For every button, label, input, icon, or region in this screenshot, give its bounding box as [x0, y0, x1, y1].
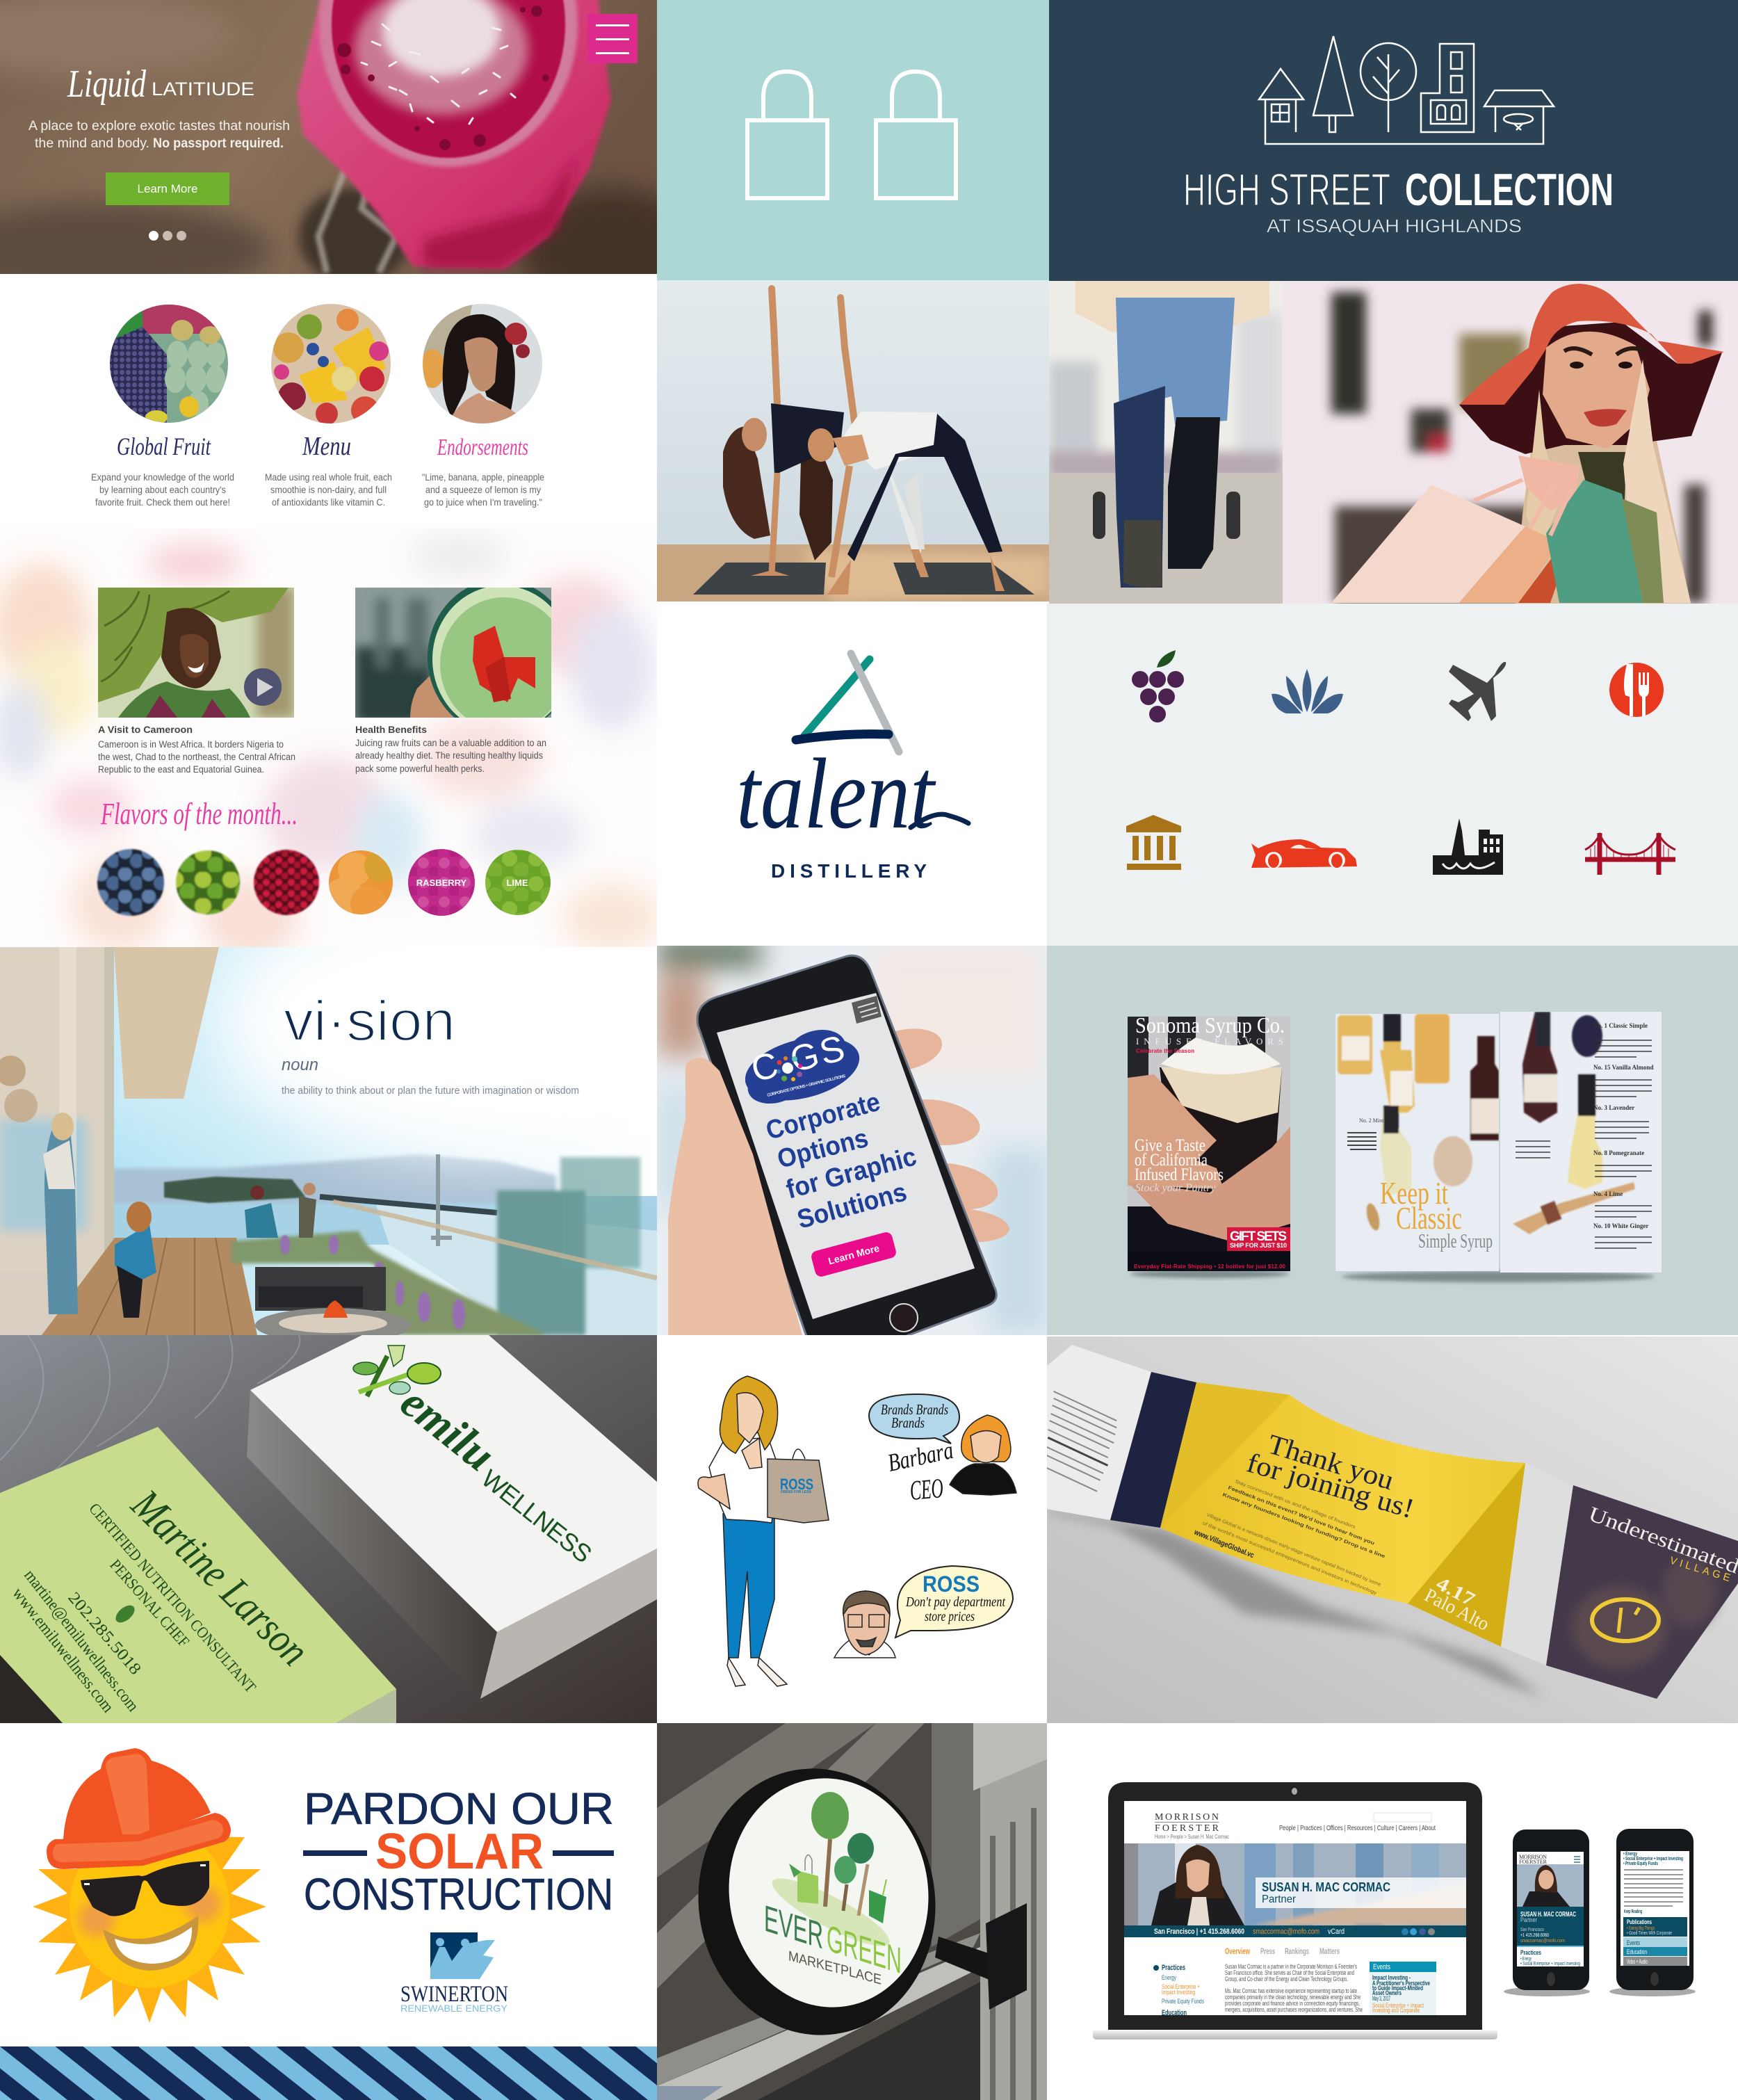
callout: Brands Brands Brands speech bubble [869, 1394, 959, 1444]
panel: teal shopping bags [657, 0, 1049, 280]
icon: classical bank [1126, 815, 1181, 870]
illustration: thumb and palm [668, 1058, 802, 1335]
text: practices sidebar: Education [1162, 2009, 1187, 2017]
sidebar: events box: Social Enterprise + Impact [1372, 2002, 1424, 2009]
image: phone right: Education [1627, 1948, 1647, 1955]
heading: Global Fruit: Global Fruit [117, 433, 211, 460]
contact bar: vCard [1328, 1928, 1345, 1936]
text: biography paragraphs: provides corporate and finance advice in connection equity financings, [1225, 2000, 1360, 2007]
heading: Menu: Menu [302, 432, 351, 461]
panel: watercolor world map section [0, 528, 660, 960]
icon: village circle logo [1592, 1599, 1659, 1641]
panel: Liquid Latitude website hero [0, 0, 657, 274]
image: phone right: • Doing Big Things [1627, 1926, 1655, 1931]
text: practices sidebar: Energy [1162, 1974, 1176, 1982]
text: menu description: Made using real whole fruit, each [265, 472, 392, 483]
text: practices sidebar [1153, 1964, 1204, 2017]
logo: Swinerton Renewable Energy: RENEWABLE ENERGY [400, 2003, 508, 2014]
title: Construction: CONSTRUCTION [304, 1869, 613, 1919]
panel: Talent Distillery logo [657, 601, 1047, 946]
text: biography paragraphs: Group, and Co-chair of the Energy and Clean Technology Groups. [1225, 1976, 1348, 1982]
text: vision definition: vi·sion [284, 990, 455, 1053]
button: Learn More: Learn More [138, 182, 197, 195]
text: green card details: Martine Larson [122, 1480, 318, 1675]
sidebar: events box: Events [1373, 1963, 1390, 1971]
text: Health Benefits: already healthy diet. The resulting healthy liquids [355, 750, 543, 761]
panel: Village Global folded invitation [1046, 1336, 1738, 1723]
image: phone left: San Francisco [1520, 1928, 1544, 1932]
panel: High Street Collection logo [1049, 0, 1738, 281]
image: phone left: • Social Enterprise + Impact Investing [1520, 1962, 1580, 1966]
text: practices sidebar: Private Equity Funds [1162, 1998, 1204, 2005]
illustration: woman with shopping bag [698, 1376, 829, 1686]
callout: Brands Brands Brands speech bubble: Brands [891, 1414, 925, 1431]
image: round sign housing [681, 1753, 952, 2051]
text: catalog cover: Stock your Pantry [1135, 1182, 1216, 1194]
text: green card details [8, 1480, 318, 1716]
text: green card details: 202.285.5018 [64, 1589, 145, 1679]
image: phone right: Publications [1627, 1919, 1652, 1925]
panel: Morrison Foerster responsive website [1047, 1723, 1738, 2100]
text: catalog cover: INFUSED FLAVORS [1136, 1036, 1283, 1047]
image: hero portrait [1124, 1843, 1466, 1925]
button: phone Learn More [810, 1231, 898, 1278]
sidebar: events box: A Practitioner's Perspective [1372, 1980, 1430, 1987]
image: phone left: +1 415.268.6060 [1520, 1933, 1549, 1938]
image: phone left: • Energy [1520, 1957, 1532, 1962]
title: Solar with rules: SOLAR [375, 1824, 544, 1880]
text: invitation details: of the world's most successful entrepreneurs and investors in technology [1201, 1521, 1378, 1596]
sidebar: events box: Investing and Corporate [1372, 2007, 1420, 2014]
panel: icon set [1047, 604, 1738, 946]
text: catalog cover: of California [1135, 1151, 1208, 1170]
tabs: Matters [1319, 1948, 1340, 1956]
image: catalog left page with bottles: No. 2 Mint [1359, 1117, 1384, 1124]
image: menu fruit platter circle [268, 302, 396, 428]
illustration: sun with hard hat and sunglasses [33, 1748, 266, 2023]
callout: Don't pay department store prices speech bubble: store prices [925, 1609, 975, 1624]
text: invitation details: Village Global is a network-driven early-stage venture capital firm backed by some [1205, 1512, 1381, 1588]
text: invitation details: Stay connected with us and the village of founders [1234, 1479, 1356, 1530]
image: endorsement portrait circle [420, 302, 546, 431]
text: phone headline [763, 1088, 920, 1235]
text: endorsement quote: and a squeeze of lemon is my [425, 485, 541, 495]
icon: line-art street scene [1259, 36, 1554, 144]
image: phone right: Video + Audio [1627, 1958, 1648, 1965]
chart: flavor circles row: LIME [506, 878, 528, 888]
text: invitation details [1192, 1479, 1386, 1596]
text: hero description [29, 119, 290, 151]
logo: ROSS on shopping bag: ROSS [780, 1476, 813, 1493]
image: phone left: MORRISON [1519, 1854, 1547, 1860]
text: A Visit to Cameroon [98, 724, 295, 775]
image: phone right: • Energy [1623, 1852, 1637, 1857]
text: catalog cover: Give a Taste [1135, 1136, 1205, 1155]
text: hero description: the mind and body. [35, 136, 149, 151]
title: High Street Collection: COLLECTION [1405, 164, 1614, 215]
image: phone left: FOERSTER [1519, 1859, 1548, 1865]
image: catalog right page with bottles and product list: No. 3 Lavender [1593, 1104, 1634, 1111]
icon: triangular A mark [796, 654, 899, 752]
image: catalog right page with bottles and product list: No. 8 Pomegranate [1593, 1149, 1644, 1156]
text: Keep it Classic: Simple Syrup [1418, 1231, 1493, 1252]
image: phone right: • Good Times With Corporate [1627, 1931, 1672, 1936]
text: menu description: of antioxidants like vitamin C. [272, 497, 385, 508]
image: phone screen [717, 993, 975, 1319]
logo: DISTILLERY wordmark: DISTILLERY [771, 860, 927, 882]
title: Pardon Our: PARDON OUR [304, 1784, 614, 1834]
sidebar: events box: to Guide Impact-Minded [1372, 1985, 1423, 1992]
image: global fruit circle [110, 305, 228, 423]
image: dark purple back panel [1546, 1485, 1738, 1699]
text: green card details: CERTIFIED NUTRITION CONSULTANT [86, 1500, 259, 1696]
text: phone headline: Options [774, 1124, 871, 1174]
logo: Evergreen Marketplace wordmark: MARKETPLACE [788, 1948, 882, 1988]
text: date and location: Palo Alto [1421, 1585, 1493, 1635]
tabs: Press [1260, 1948, 1275, 1956]
image: phone body [697, 955, 996, 1342]
panel: ROSS character illustrations [657, 1336, 1047, 1723]
panel: woman shopping photo [1283, 281, 1738, 604]
panel: Vision real-estate page [0, 890, 779, 1343]
image: yellow main panel [1160, 1382, 1525, 1647]
text: global fruit description: Expand your knowledge of the world [91, 472, 234, 483]
contact bar [1124, 1925, 1466, 1937]
text: invitation details: Know any founders looking for funding? Drop us a line [1221, 1492, 1386, 1560]
callout: Don't pay department store prices speech bubble [895, 1566, 1013, 1638]
diagonal hazard stripes [0, 2046, 657, 2100]
logo: Evergreen Marketplace wordmark: EVER [764, 1897, 823, 1957]
text: phone headline: Solutions [794, 1177, 910, 1235]
text: endorsement quote [422, 472, 544, 508]
icon: grapes [1132, 650, 1184, 722]
button: phone Learn More: Learn More [827, 1242, 881, 1266]
panel: Pardon Our Solar Construction sign [0, 1723, 657, 2100]
text: Susan H. Mac Cormac banner [1256, 1877, 1466, 1908]
image: phone left [1504, 1830, 1590, 1996]
text: Morrison Foerster header: Home > People > Susan H. Mac Cormac [1155, 1834, 1229, 1840]
text: biography paragraphs: Ms. Mac Cormac has extensive experience representing startup to late [1225, 1987, 1357, 1994]
callout: Don't pay department store prices speech bubble: ROSS [923, 1572, 980, 1597]
image: catalog right page with bottles and product list: No. 1 Classic Simple [1593, 1022, 1648, 1029]
icon: shopping bag right [876, 72, 956, 198]
text: Morrison Foerster header: MORRISON [1155, 1812, 1219, 1823]
text: Thank you for joining us: for joining us! [1244, 1446, 1418, 1524]
tabs [1225, 1948, 1340, 1956]
text: VILLAGE: VILLAGE [1668, 1555, 1732, 1584]
text: date and location: 4.17 [1433, 1573, 1478, 1610]
text: Susan H. Mac Cormac banner: Partner [1262, 1893, 1297, 1905]
icon: hamburger menu [587, 14, 637, 63]
image: catalog left page with bottles [1335, 1014, 1499, 1271]
text: Health Benefits: Juicing raw fruits can be a valuable addition to an [355, 738, 546, 748]
text: green card details: PERSONAL CHEF [106, 1556, 193, 1651]
text: phone headline: Corporate [763, 1088, 884, 1146]
text: Keep it Classic: Classic [1396, 1200, 1462, 1236]
text: menu description [265, 472, 392, 508]
icon: home button [890, 1304, 918, 1332]
logo: COGS cloud [738, 1024, 866, 1111]
logo: Swinerton Renewable Energy [400, 1932, 508, 2014]
title: Solar with rules [303, 1824, 614, 1880]
image: green smoothie with strawberries [355, 579, 574, 735]
image: catalog right page with bottles and product list: No. 15 Vanilla Almond [1593, 1064, 1654, 1071]
text: vision definition: the ability to think about or plan the future with imagination or wisdom [282, 1085, 579, 1097]
text: practices sidebar: Practices [1162, 1964, 1185, 1972]
text: invitation details: Feedback on this event? We'd love to hear from you [1227, 1485, 1375, 1546]
sidebar: events box [1370, 1962, 1436, 2015]
image: white inner flap [1046, 1345, 1151, 1520]
image: phone left: Partner [1520, 1916, 1537, 1923]
icon: red sports car [1251, 839, 1357, 869]
logo: emilu WELLNESS wordmark [391, 1377, 597, 1569]
icon: fork, spoon and leaves logo [353, 1346, 441, 1396]
title: High Street Collection: HIGH STREET [1183, 164, 1390, 215]
image: terrace building overhang [0, 947, 219, 1335]
logo: Evergreen Marketplace wordmark: GREEN [827, 1917, 902, 1982]
text: green card details: martine@emiluwellness.com [20, 1567, 142, 1715]
text: global fruit description [91, 472, 234, 508]
panel: COGS phone mockup [657, 939, 1050, 1342]
image: phone right: Events [1627, 1939, 1640, 1946]
panel: three feature columns [91, 299, 546, 508]
image: phone right: Keep Reading [1624, 1909, 1642, 1914]
text: global fruit description: favorite fruit. Check them out here! [95, 497, 230, 508]
text: endorsement quote: "Lime, banana, apple, pineapple [422, 472, 544, 483]
text: invitation details: www.VillageGlobal.vc [1192, 1528, 1256, 1560]
image: deck and skyline [42, 1154, 657, 1343]
tabs: Overview [1225, 1948, 1250, 1956]
image: Cameroon woman with bananas [98, 588, 294, 718]
text: A Visit to Cameroon: Cameroon is in West Africa. It borders Nigeria to [98, 739, 284, 750]
logo: Swinerton Renewable Energy: SWINERTON [400, 1982, 508, 2007]
callout: Brands Brands Brands speech bubble: Brands Brands [881, 1401, 948, 1418]
illustration: Barbara portrait [950, 1415, 1016, 1495]
carousel dots [149, 231, 186, 241]
text: catalog cover: Infused Flavors [1135, 1165, 1224, 1184]
text: Morrison Foerster header: People | Practices | Offices | Resources | Culture | Careers | About [1279, 1824, 1436, 1832]
logo: ROSS on shopping bag: DRESS FOR LESS [781, 1490, 812, 1494]
text: Barbara CEO: CEO [909, 1472, 945, 1506]
text: biography paragraphs: San Francisco office. She serves as Chair of the Social Enterprise and [1225, 1969, 1354, 1976]
panel: Sonoma Syrup catalog [1047, 946, 1738, 1335]
text: catalog cover: Sonoma Syrup Co. [1135, 1012, 1285, 1037]
callout: Don't pay department store prices speech bubble: Don't pay department [905, 1594, 1005, 1610]
text: catalog cover: GIFT SETS [1230, 1229, 1287, 1244]
text: hero title [67, 70, 254, 105]
text: catalog cover: Celebrate the Season [1136, 1048, 1194, 1054]
panel: Evergreen Marketplace sign photo [657, 1723, 1047, 2100]
illustration: two women in triangle pose [723, 289, 1005, 595]
illustration: hand fingers behind phone [861, 1022, 1011, 1246]
logo: COGS cloud: CORPORATE OPTIONS + GRAPHIC SOLUTIONS [767, 1074, 846, 1098]
panel: yoga photo [657, 280, 1049, 601]
image: phone left: Practices [1520, 1949, 1541, 1956]
text: catalog cover [1134, 1012, 1287, 1270]
text: global fruit description: by learning about each country's [99, 485, 226, 495]
text: catalog cover: SHIP FOR JUST $10 [1230, 1242, 1287, 1249]
text: Health Benefits [355, 724, 546, 774]
contact bar: smaccormac@mofo.com [1253, 1928, 1319, 1936]
sidebar: events box: Impact Investing - [1372, 1974, 1411, 1981]
text: green card details: www.emiluwellness.com [8, 1585, 117, 1716]
image: round sign face [714, 1766, 943, 2020]
text: hero title: LATITIUDE [152, 79, 254, 99]
text: A Visit to Cameroon: the west, Chad to the northeast, the Central African [98, 752, 295, 762]
icon: shopping bag left [747, 72, 827, 198]
text: vision definition: noun [282, 1056, 318, 1074]
text: hero description: A place to explore exotic tastes that nourish [29, 119, 290, 134]
icon: smoothie jar photo [297, 0, 611, 285]
sidebar: events box: Asset Owners [1372, 1989, 1402, 1996]
image: white fold strip [1501, 1463, 1573, 1665]
text: biography paragraphs: companies primarily in the clean technology, renewable energy and She [1225, 1994, 1361, 2001]
icon: hamburger menu on phone [852, 996, 882, 1024]
image: laptop frame [1093, 1782, 1497, 2040]
chart: flavor circles row: RASBERRY [416, 878, 467, 888]
text: practices sidebar: Social Enterprise + [1162, 1983, 1200, 1991]
image: phone right [1609, 1829, 1696, 1996]
text: Keep it Classic [1380, 1175, 1493, 1252]
image: white card stack [247, 1335, 657, 1699]
tabs: Rankings [1285, 1948, 1309, 1956]
icon: city skyline over water [1433, 818, 1503, 875]
text: Barbara CEO: Barbara [885, 1436, 956, 1477]
text: phone headline: for Graphic [783, 1142, 920, 1205]
text: hero description: No passport required. [153, 136, 284, 151]
image: phone right: • Social Enterprise + Impact Investing [1623, 1857, 1683, 1861]
text: Health Benefits: pack some powerful health perks. [355, 764, 485, 774]
image: catalog right page with bottles and product list: No. 10 White Ginger [1593, 1222, 1648, 1229]
icon: lotus [1272, 669, 1343, 713]
chart: flavor circles row [97, 848, 551, 922]
logo: COGS cloud: C GS [747, 1028, 849, 1090]
heading: Endorsements: Endorsements [437, 435, 528, 460]
text: Thank you for joining us: Thank you [1264, 1428, 1397, 1496]
text: endorsement quote: go to juice when I'm traveling." [424, 497, 542, 508]
text: Susan H. Mac Cormac banner: SUSAN H. MAC CORMAC [1262, 1880, 1390, 1894]
text: vision definition [282, 990, 579, 1097]
text: biography paragraphs: mergers, acquisitions, asset purchases reorganizations, and ventures. She [1225, 2006, 1363, 2013]
text: practices sidebar: Impact Investing [1162, 1989, 1195, 1996]
image: phone left: SUSAN H. MAC CORMAC [1520, 1911, 1576, 1919]
image: navy band [1110, 1372, 1196, 1528]
text: A Visit to Cameroon: Republic to the east and Equatorial Guinea. [98, 764, 264, 775]
image: catalog cover [1128, 1017, 1290, 1271]
logo: talent script wordmark: talent [736, 738, 936, 850]
text: catalog cover: Everyday Flat-Rate Shipping • 12 bottles for just $12.00 [1134, 1263, 1286, 1270]
logo: Evergreen Marketplace wordmark [764, 1897, 902, 1988]
text: menu description: smoothie is non-dairy, and full [270, 485, 387, 495]
image: green card [0, 1427, 396, 1723]
image: sign bracket [935, 1903, 1027, 2010]
logo: Evergreen trees, bag and cup [765, 1792, 896, 1957]
button: Learn More [106, 172, 229, 205]
image: phone right: • Private Equity Funds [1623, 1861, 1658, 1866]
icon: airplane [1449, 662, 1506, 721]
text: Health Benefits: Health Benefits [355, 724, 427, 735]
panel: stroller boots photo [1049, 281, 1283, 605]
image: catalog right page with bottles and product list [1500, 1012, 1662, 1273]
subtitle: At Issaquah Highlands: AT ISSAQUAH HIGHLANDS [1267, 216, 1522, 236]
text: Morrison Foerster header [1155, 1812, 1436, 1840]
panel: Emilu Wellness business cards [0, 1335, 657, 1723]
icon: fork and knife circle [1609, 663, 1664, 717]
text: hero title: Liquid [67, 63, 147, 106]
logo: emilu WELLNESS wordmark: emilu [391, 1377, 504, 1481]
text: Barbara CEO [885, 1436, 956, 1506]
text: Underestimated: Underestimated [1586, 1503, 1738, 1578]
logo: emilu WELLNESS wordmark: WELLNESS [476, 1464, 597, 1569]
text: Morrison Foerster header: FOERSTER [1155, 1823, 1219, 1834]
text: Keep it Classic: Keep it [1380, 1175, 1448, 1211]
image: terrace people [43, 1113, 316, 1318]
text: A Visit to Cameroon: A Visit to Cameroon [98, 724, 193, 735]
icon: video play button [244, 668, 282, 706]
icon: golden gate bridge [1585, 833, 1675, 875]
image: phone left: smaccormac@mofo.com [1520, 1939, 1565, 1944]
illustration: woman with red hat and bags [1331, 284, 1724, 604]
contact bar: San Francisco | +1 415.268.6060 [1154, 1928, 1244, 1936]
sidebar: events box: May 3, 2017 [1372, 1995, 1390, 2002]
text: biography paragraphs [1225, 1963, 1363, 2013]
image: catalog right page with bottles and product list: No. 4 Lime [1593, 1190, 1623, 1197]
text: biography paragraphs: Susan Mac Cormac is a partner in the Corporate Morrison & Foerster's [1225, 1963, 1357, 1970]
illustration: coat, jeans and boots [1075, 281, 1269, 588]
heading: Flavors of the month: Flavors of the month... [100, 797, 298, 831]
illustration: man portrait [834, 1591, 895, 1658]
